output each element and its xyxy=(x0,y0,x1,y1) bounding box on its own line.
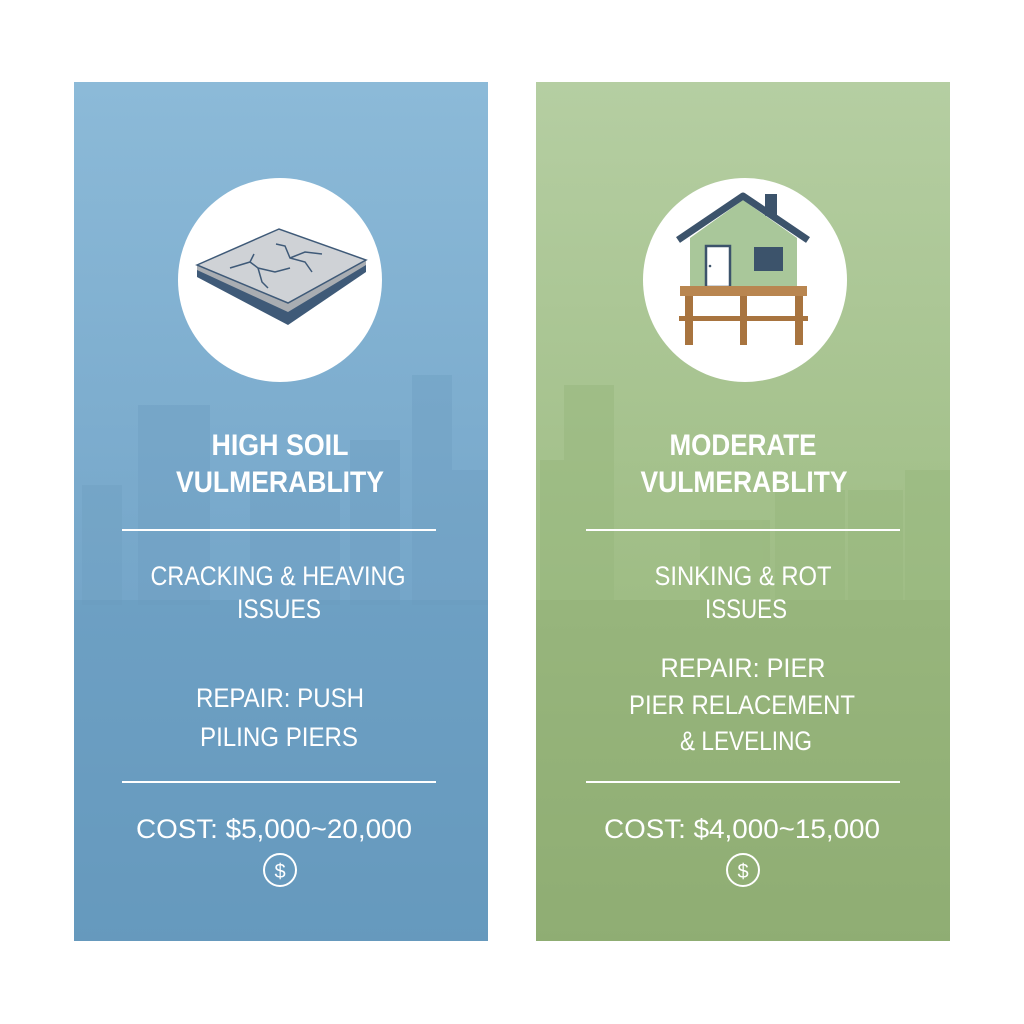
text: repair: PILING PIERS xyxy=(200,722,358,752)
text: cost: COST: $4,000~15,000 xyxy=(604,814,880,844)
text: issues: ISSUES xyxy=(705,594,787,624)
text: repair: REPAIR: PIER xyxy=(660,653,826,683)
text: issues: SINKING & ROT xyxy=(654,561,832,591)
text: repair: PIER RELACEMENT xyxy=(629,690,855,720)
text: repair: & LEVELING xyxy=(680,726,812,756)
heading: MODERATE xyxy=(670,429,816,462)
heading: HIGH SOIL xyxy=(212,429,348,462)
icon: dollar: $ xyxy=(737,861,749,883)
icon: dollar: $ xyxy=(274,861,286,883)
text: repair xyxy=(629,653,855,756)
panel: high soil vulnerability xyxy=(74,82,488,941)
icon: dollar xyxy=(727,854,759,886)
heading xyxy=(176,429,384,499)
text: issues: ISSUES xyxy=(237,594,321,624)
icon: house on piers xyxy=(643,178,847,382)
panel: moderate vulnerability xyxy=(536,82,950,941)
text: issues xyxy=(654,561,832,624)
heading: VULMERABLITY xyxy=(176,466,384,499)
heading xyxy=(640,429,848,499)
text: cost: COST: $5,000~20,000 xyxy=(136,814,412,844)
text: repair: REPAIR: PUSH xyxy=(196,683,364,713)
icon: cracked slab xyxy=(178,178,382,382)
text: repair xyxy=(196,683,364,752)
heading: VULMERABLITY xyxy=(640,466,848,499)
text: issues xyxy=(150,561,406,624)
text: issues: CRACKING & HEAVING xyxy=(150,561,406,591)
icon: dollar xyxy=(264,854,296,886)
